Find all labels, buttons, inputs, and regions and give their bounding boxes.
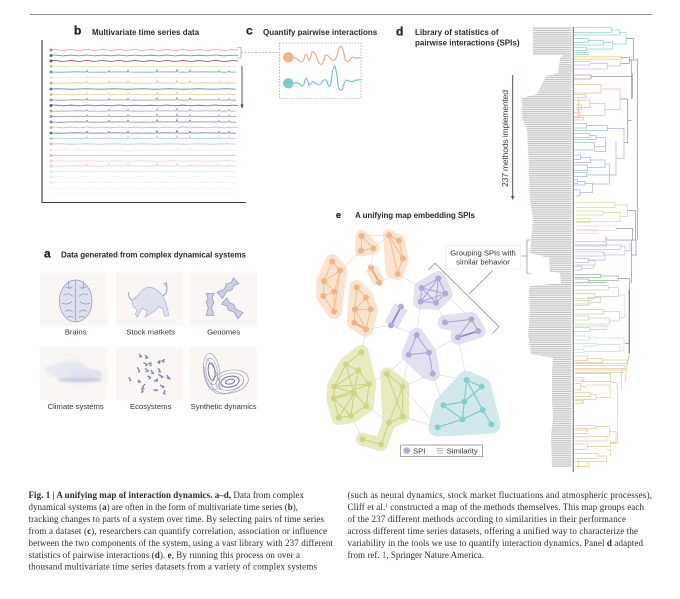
- olive edges: [334, 352, 403, 444]
- panel a heading: Data generated from complex dynamical systems: [61, 250, 247, 260]
- panel: climate systems: [40, 347, 108, 411]
- axis label: 237 methods implemented: [500, 75, 514, 200]
- maroon cluster: [574, 75, 591, 79]
- panel d letter: d: [396, 24, 403, 38]
- orange edges: [323, 235, 403, 329]
- panel: stock markets: [116, 272, 183, 336]
- callout: grouping SPIs: [446, 246, 520, 269]
- legend: SPI: [413, 447, 425, 456]
- connector from bracket to panel c: [241, 52, 279, 54]
- caption left column: dynamical systems (a) are often in the form of multivariate time series (b),: [28, 502, 298, 512]
- top rule: [30, 14, 652, 15]
- panel: genomes: [190, 272, 257, 336]
- panel: ecosystems: [116, 347, 183, 411]
- bracket linking callout to dendrogram labels: [521, 240, 530, 274]
- caption left column: from a dataset (c), researchers can quantify correlation, association or influence: [28, 526, 327, 536]
- callout bracket: [428, 263, 499, 333]
- panel b letter: b: [74, 24, 81, 38]
- panel e heading: A unifying map embedding SPIs: [355, 211, 476, 220]
- dendrogram spine: [573, 27, 574, 472]
- caption left column: tracking changes to parts of a system over time. By selecting pairs of time series: [28, 514, 324, 524]
- caption left column: between the two components of the system, using a vast library with 237 different: [28, 538, 333, 548]
- caption right column: of the 237 different methods according to similarities in their performance: [348, 514, 626, 524]
- panel: synthetic dynamics: [189, 347, 257, 411]
- orange SPI nodes: [320, 232, 406, 332]
- yellow and lilac clusters: [574, 57, 622, 59]
- SPI name labels: [522, 27, 572, 467]
- caption left column: thousand multivariate time series datasets from a variety of complex systems: [28, 562, 317, 572]
- dashed selection box: [280, 43, 361, 98]
- dendrogram lower half: [575, 240, 636, 469]
- caption right column: variability in the tools we use to quantify interaction dynamics. Panel d adapted: [348, 538, 644, 548]
- panel d heading: pairwise interactions (SPIs): [415, 38, 520, 48]
- yellow-green cluster: [575, 203, 628, 222]
- caption left column: [28, 490, 333, 572]
- panel c heading: Quantify pairwise interactions: [263, 28, 378, 37]
- orange cluster: [574, 84, 620, 120]
- teal edges: [438, 380, 491, 427]
- lilac cluster: [575, 242, 630, 270]
- teal signal: [283, 66, 361, 90]
- green cluster: [575, 286, 625, 332]
- panel: genomes: Genomes: [207, 327, 240, 336]
- heading text: Library of statistics of: [415, 28, 499, 37]
- teal cluster: [574, 28, 626, 55]
- time series start dots: [50, 48, 52, 184]
- panel c: pairwise interactions: [246, 24, 378, 98]
- root links: [591, 38, 637, 240]
- root links lower: [618, 240, 636, 343]
- olive SPI nodes: [331, 349, 406, 447]
- callout: grouping SPIs: Grouping SPIs with: [450, 248, 516, 257]
- bracket selecting a pair: [237, 48, 241, 58]
- caption left column: Fig. 1 | A unifying map of interaction dynamics. a–d, Data from complex: [28, 490, 304, 500]
- callout: grouping SPIs: similar behavior: [456, 257, 510, 266]
- axis label: 237 methods implemented: 237 methods implemented: [500, 90, 510, 187]
- purple SPI nodes: [388, 275, 481, 377]
- panel b heading: Multivariate time series data: [92, 28, 200, 37]
- blue cluster: [574, 123, 624, 196]
- network hulls: [323, 235, 491, 444]
- panel: climate systems: Climate systems: [48, 402, 104, 411]
- time series axes: [42, 40, 246, 202]
- teal SPI nodes: [435, 377, 494, 430]
- caption right column: from ref. 1, Springer Nature America.: [348, 550, 484, 560]
- caption left column: statistics of pairwise interactions (d). e, By running this process on over a: [28, 550, 300, 560]
- orange signal: [283, 46, 361, 64]
- caption right column: (such as neural dynamics, stock market fluctuations and atmospheric processes),: [348, 490, 652, 500]
- caption right column: constructed a map of the methods themselves. This map groups each: [388, 502, 644, 512]
- caption right column: Cliff et al.: [348, 502, 385, 512]
- panel a letter: a: [44, 246, 51, 260]
- panel: stock markets: Stock markets: [126, 327, 175, 336]
- purple edges: [409, 278, 478, 374]
- panel: brains: Brains: [65, 327, 87, 336]
- panel b: multivariate time series: [42, 24, 246, 202]
- panel: synthetic dynamics: Synthetic dynamics: [191, 402, 257, 411]
- dark green sub-cluster: [575, 274, 618, 283]
- legend: [401, 445, 483, 457]
- legend: Similarity: [447, 447, 478, 456]
- dendrogram upper half: [574, 28, 637, 240]
- panel e: unifying map: [320, 210, 520, 457]
- panel: brains: [40, 272, 108, 336]
- pink cluster: [576, 226, 616, 233]
- arrow: down through series: [240, 66, 244, 109]
- caption right column: 1: [385, 504, 388, 509]
- inter-cluster similarity links: [340, 235, 471, 439]
- panel e letter: e: [336, 210, 341, 220]
- panel a: data sources: [40, 246, 257, 411]
- panel c letter: c: [246, 24, 253, 38]
- caption right column: [348, 490, 652, 560]
- caption right column: across different time series datasets, offering a unified way to characterize the: [348, 526, 638, 536]
- tan cluster: [575, 356, 627, 443]
- pale cyan cluster: [575, 336, 624, 353]
- time series traces: [51, 50, 238, 194]
- panel: ecosystems: Ecosystems: [130, 402, 171, 411]
- panel d heading: [396, 24, 520, 48]
